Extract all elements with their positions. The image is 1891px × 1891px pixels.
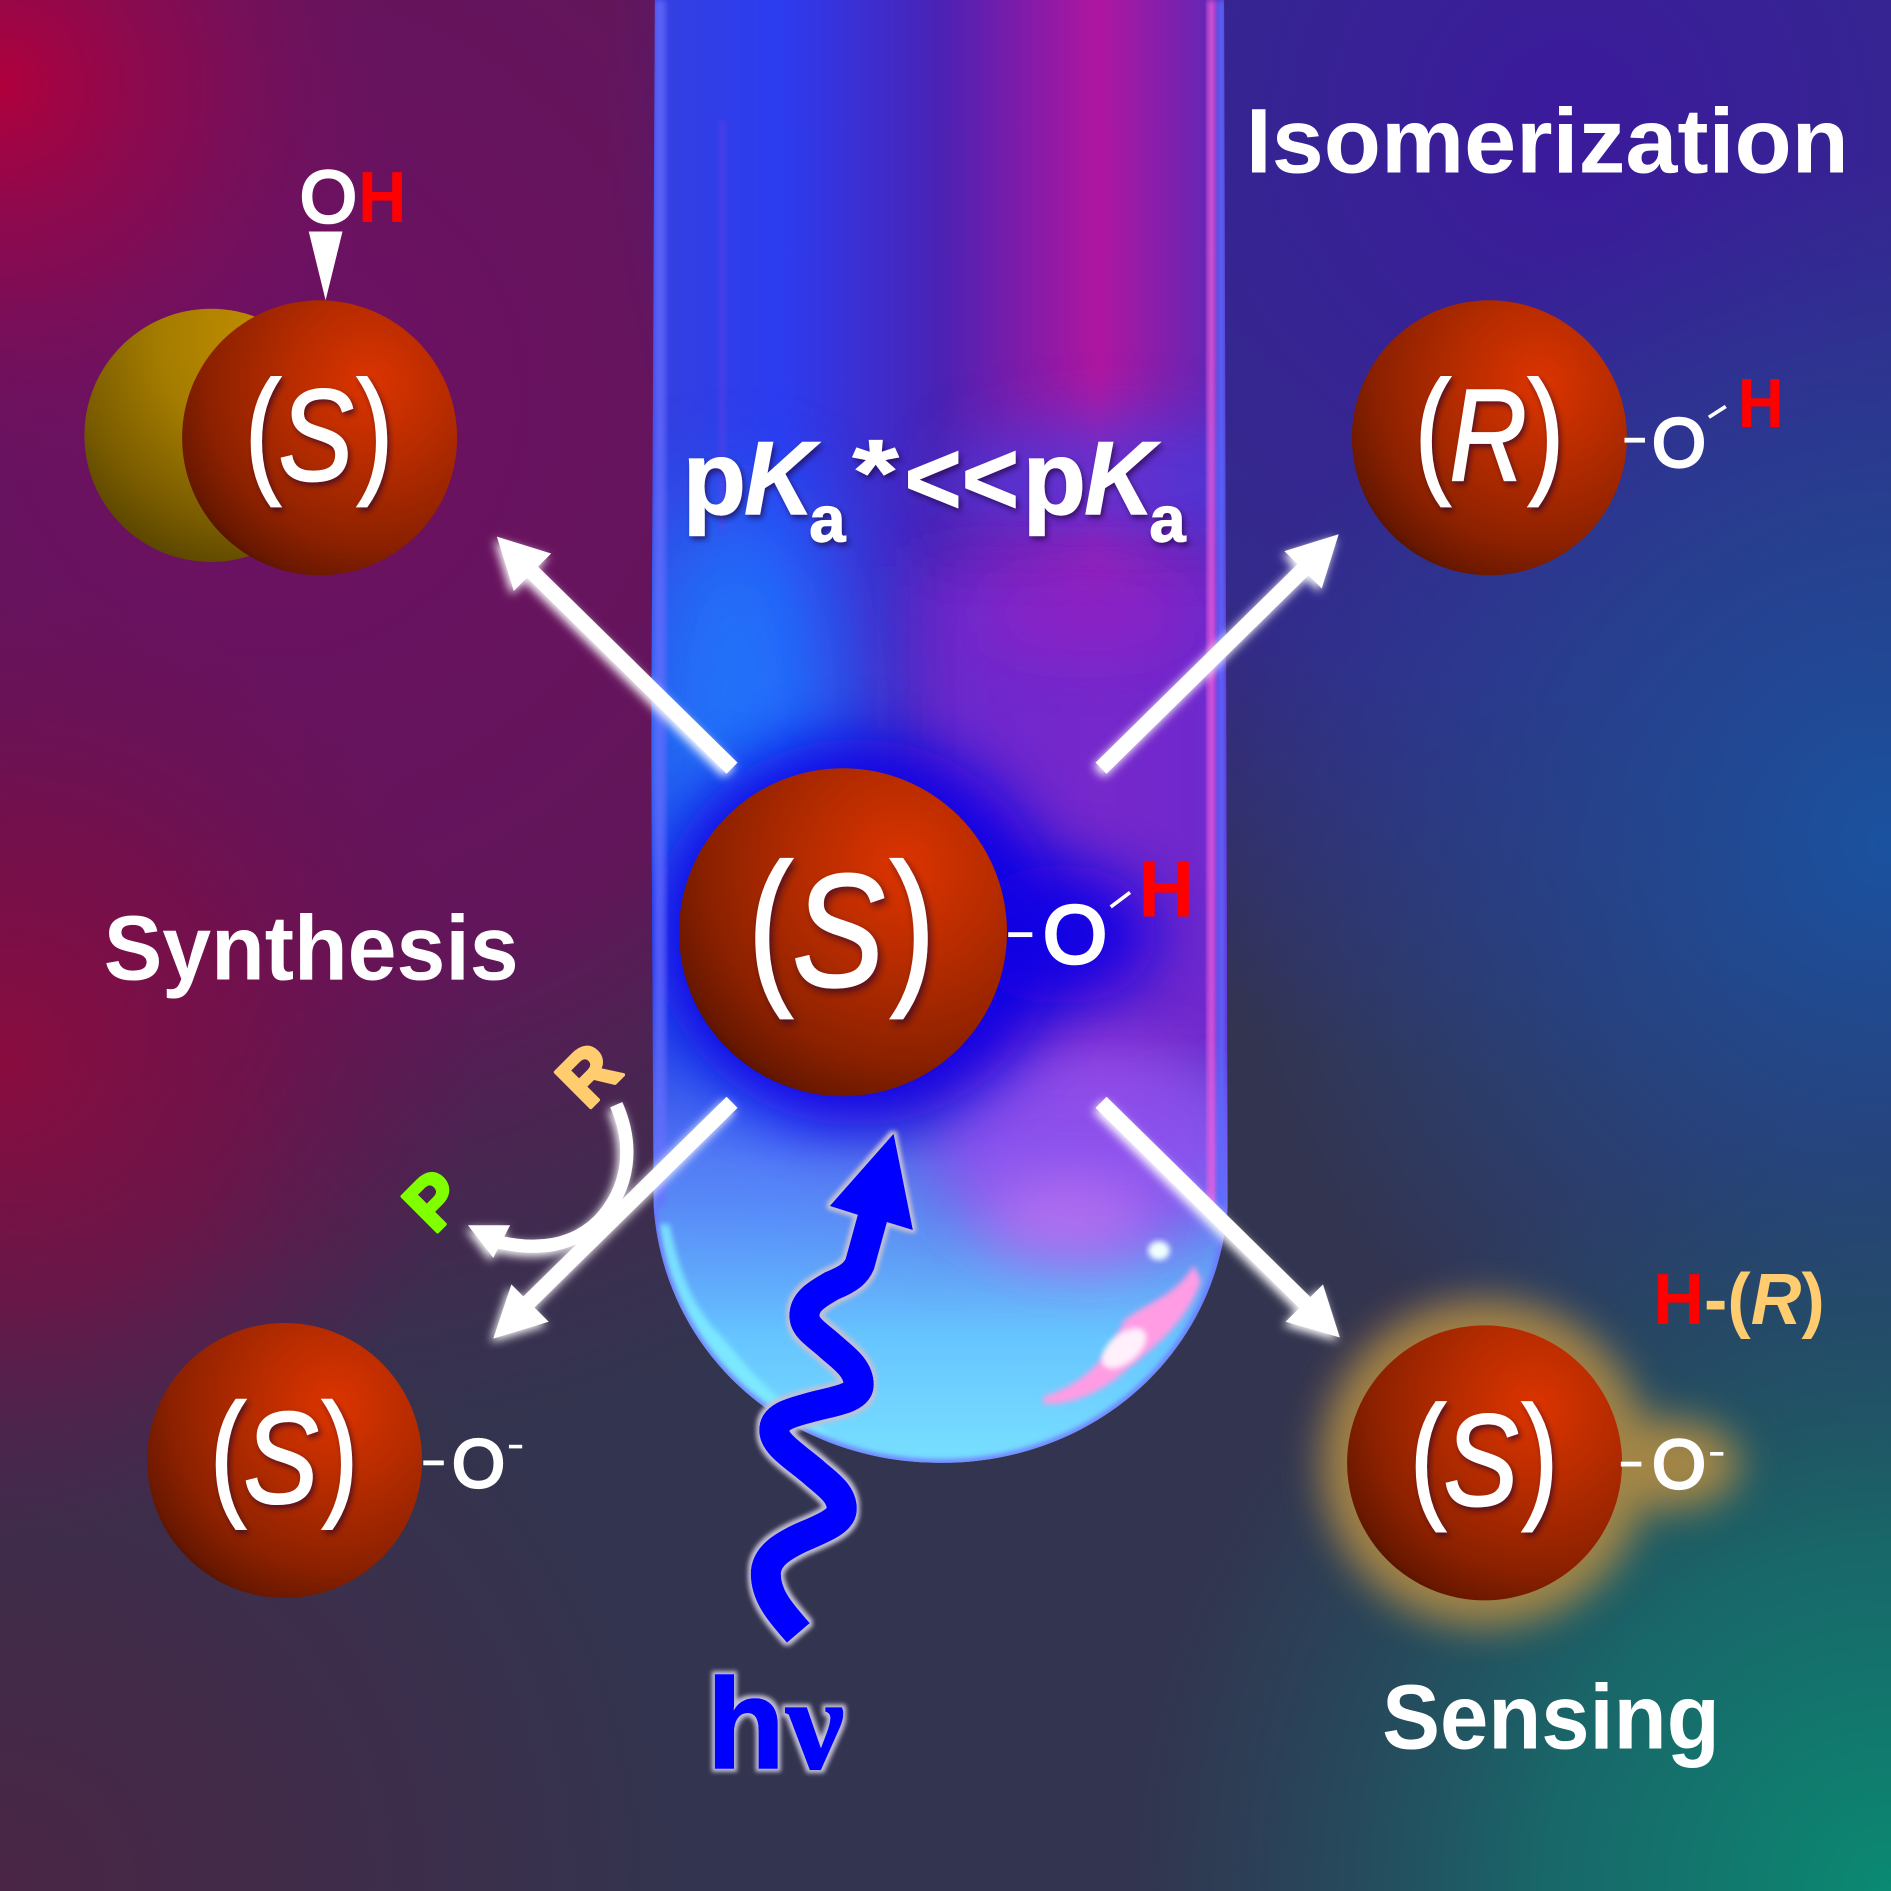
text: pKa*<<pKa: K <box>1084 420 1161 536</box>
label: R reactant: R <box>542 1029 636 1122</box>
curved arrow: reactant to product <box>468 1105 627 1258</box>
arrow: to sensing <box>1101 1102 1340 1337</box>
glowing test tube <box>651 0 1228 1463</box>
label -O-H large <box>1008 845 1194 980</box>
gold sphere <box>84 309 338 562</box>
label (S): ( <box>1410 1378 1446 1533</box>
heading: Sensing: Sensing <box>1382 1667 1720 1769</box>
label -O-H: H <box>1738 364 1784 442</box>
red sphere <box>147 1323 422 1598</box>
label: P product: P <box>389 1156 480 1246</box>
label (S): ) <box>322 1375 358 1530</box>
sphere group: chiral complex with gold partner <box>84 158 457 575</box>
heading: Isomerization: Isomerization <box>1246 90 1849 192</box>
sphere group: R isomer <box>1352 300 1784 575</box>
sphere group: deprotonated S <box>147 1323 522 1598</box>
label -O minus <box>423 1427 522 1502</box>
label (S): S <box>244 1385 318 1531</box>
label OH: O <box>300 158 357 238</box>
label: hv: hν <box>707 1653 844 1797</box>
sphere group: sensing S with orange glow <box>1321 1299 1740 1627</box>
text: pKa*<<pKa: * <box>853 422 899 524</box>
label (R): R <box>1450 362 1527 508</box>
label (R) <box>1415 353 1564 508</box>
label (S): ( <box>210 1375 246 1530</box>
label -O-H large: H <box>1138 845 1194 935</box>
label (S) <box>210 1375 358 1531</box>
label -O minus: O <box>452 1427 505 1502</box>
label -O minus: O <box>1652 1426 1706 1503</box>
wedge bond <box>309 232 343 300</box>
label (S): ) <box>1522 1378 1558 1533</box>
sphere group: central excited S <box>679 768 1194 1096</box>
label (S) large: S <box>793 841 885 1020</box>
label (S) <box>245 353 393 508</box>
red sphere S large <box>679 768 1007 1096</box>
red sphere <box>1347 1325 1622 1600</box>
label: H-(R): H-(R) <box>1653 1260 1825 1340</box>
label (R): ( <box>1415 353 1451 508</box>
arrow: to deprotonated S <box>493 1102 732 1339</box>
text: pKa*<<pKa: a <box>1149 482 1186 555</box>
label (S): ) <box>357 353 393 508</box>
label OH <box>300 158 406 238</box>
label (S) large: ) <box>890 830 935 1020</box>
label -O-H <box>1624 364 1784 482</box>
text: pKa*<<pKa: K <box>744 420 821 536</box>
label (S) <box>1410 1378 1558 1533</box>
text: pKa*<<pKa <box>683 420 1186 555</box>
label -O-H large: O <box>1043 889 1107 980</box>
label -O minus <box>1621 1426 1723 1503</box>
label (S) large <box>748 830 935 1020</box>
text: pKa*<<pKa: p <box>683 420 746 536</box>
label -O-H: O <box>1652 405 1706 482</box>
red sphere R <box>1352 300 1627 575</box>
text: pKa*<<pKa: p <box>1023 420 1086 536</box>
label (S): ( <box>245 353 281 508</box>
orange glow <box>1321 1299 1740 1627</box>
text: pKa*<<pKa: << <box>904 420 1019 536</box>
label (S) large: ( <box>748 830 793 1020</box>
arrow: to synthesis complex <box>497 537 732 768</box>
heading: Synthesis: Synthesis <box>104 897 519 999</box>
text: pKa*<<pKa: a <box>809 482 846 555</box>
label (R): ) <box>1528 353 1564 508</box>
label OH: H <box>358 158 406 238</box>
icon: wavy blue light arrow <box>766 1134 913 1633</box>
label (S): S <box>1444 1387 1518 1533</box>
label (S): S <box>279 362 353 508</box>
arrow: to isomerization <box>1101 534 1339 768</box>
red sphere S <box>182 300 457 575</box>
